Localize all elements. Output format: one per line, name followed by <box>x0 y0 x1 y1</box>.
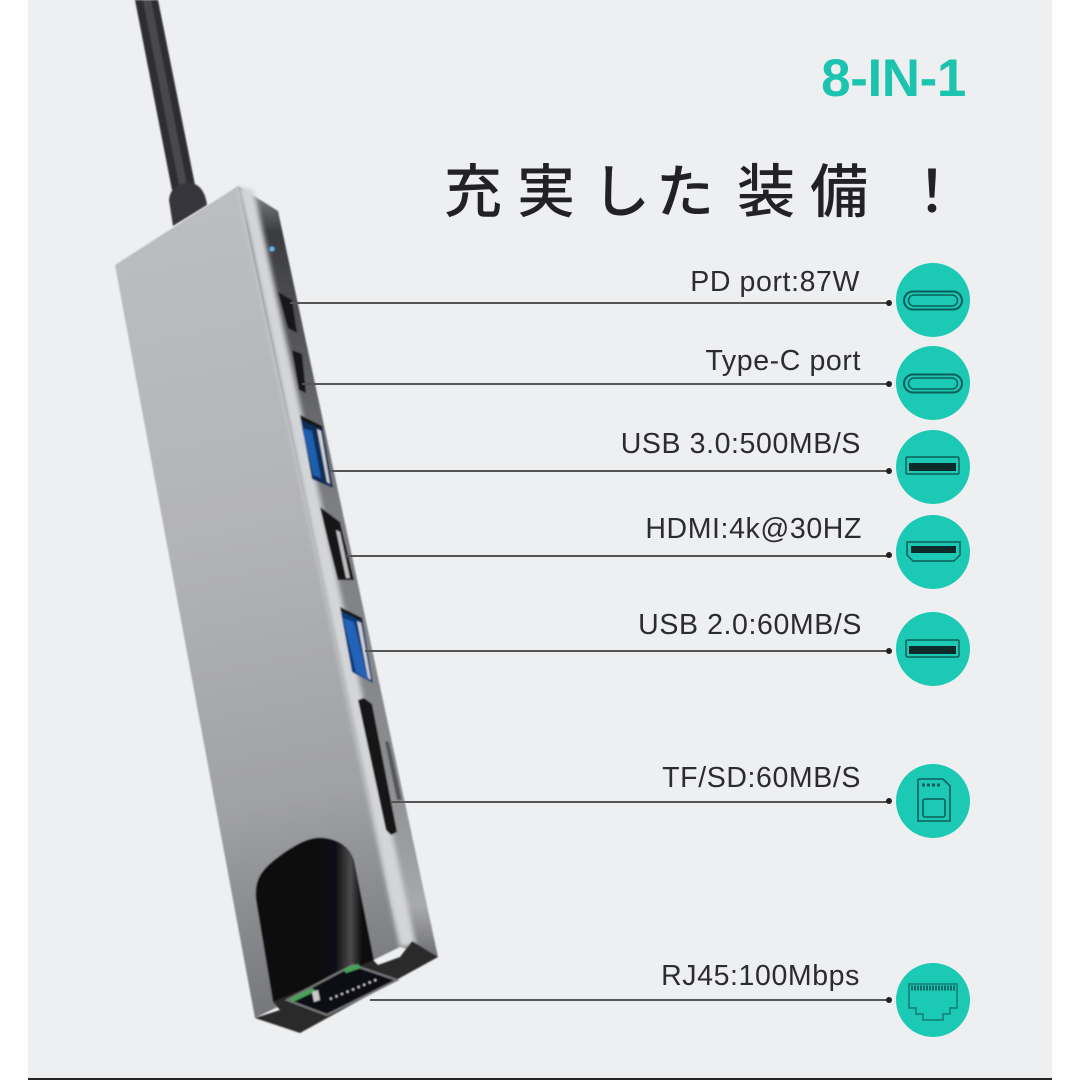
callout: Type-C port <box>302 345 970 420</box>
icon: RJ45 socket <box>896 963 970 1037</box>
hub body top face <box>115 186 400 1018</box>
label: PD port:87W <box>690 266 860 298</box>
callout: PD port <box>290 263 970 337</box>
label: TF/SD:60MB/S <box>662 762 861 794</box>
label: RJ45:100Mbps <box>661 960 860 992</box>
icon: USB-A <box>896 612 970 686</box>
port: TF/SD slots <box>358 698 402 835</box>
leader line <box>345 555 889 557</box>
RJ45 port <box>287 964 397 1015</box>
heading: 充実した装備！: 充実した装備！ <box>444 160 961 225</box>
leader line <box>390 801 889 803</box>
hub end face <box>255 941 438 1033</box>
icon: USB-C <box>896 346 970 420</box>
leader line <box>330 470 889 472</box>
RJ45 cap <box>256 838 374 1002</box>
label: Type-C port <box>706 345 861 377</box>
port: USB 2.0 <box>340 607 373 683</box>
icon: USB-A <box>896 430 970 504</box>
leader line <box>290 302 889 304</box>
callout: TF/SD <box>390 762 970 838</box>
status LED <box>270 246 274 252</box>
callout: RJ45 <box>370 960 970 1037</box>
hub side edge <box>238 186 438 957</box>
label: USB 2.0:60MB/S <box>638 609 862 641</box>
icon: SD card <box>896 764 970 838</box>
port: HDMI <box>320 507 354 580</box>
port: PD <box>278 292 297 333</box>
callout: USB 2.0 <box>365 609 970 686</box>
leader line <box>370 999 889 1001</box>
leader line <box>365 650 889 652</box>
cable <box>135 0 207 226</box>
icon: USB-C <box>896 263 970 337</box>
port: USB 3.0 <box>300 415 333 488</box>
callout: HDMI <box>345 513 970 589</box>
label: HDMI:4k@30HZ <box>645 513 862 545</box>
leader line <box>302 383 889 385</box>
icon: HDMI <box>896 515 970 589</box>
title: 8-IN-1: 8-IN-1 <box>821 49 966 108</box>
port: Type-C <box>292 350 306 393</box>
callout: USB 3.0 <box>330 428 970 504</box>
product: USB-C hub <box>115 0 438 1033</box>
label: USB 3.0:500MB/S <box>621 428 861 460</box>
